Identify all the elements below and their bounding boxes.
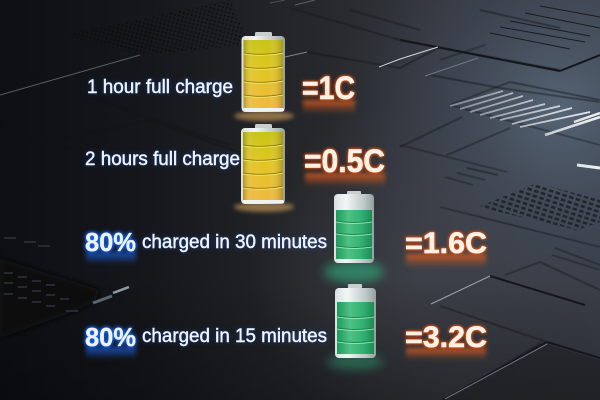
rate: =0.5C: =0.5C: [304, 143, 385, 179]
label: 2 hours full charge: 2 hours full charge: [85, 148, 240, 170]
label: 80% charged in 15 minutes: [85, 322, 327, 359]
rate: =1C: =1C: [302, 70, 355, 106]
battery: yellow 2 hours: [234, 124, 294, 212]
laptop keyboard: [0, 237, 129, 338]
dot grid panel: [478, 183, 600, 230]
label: 1 hour full charge: 1 hour full charge: [87, 76, 233, 98]
label: 80% charged in 15 minutes: 80%: [85, 322, 136, 352]
battery: green 30 minutes: [324, 191, 384, 283]
label: 80% charged in 30 minutes: charged in 30 minutes: [142, 231, 327, 253]
vent slots on the board: [450, 91, 600, 168]
row 3: 80% charged in 30 minutes: [85, 191, 487, 283]
row 1: 1 hour full charge: [87, 32, 355, 121]
battery: green 15 minutes: [327, 284, 383, 369]
top-right slotted panel: [490, 6, 600, 49]
rate: =3.2C: =3.2C: [405, 321, 487, 354]
row 4: 80% charged in 15 minutes: [85, 284, 487, 369]
thick board edges: [400, 40, 600, 400]
battery: yellow 1 hour: [234, 32, 294, 121]
label: 80% charged in 30 minutes: [85, 227, 327, 264]
row 2: 2 hours full charge: [85, 124, 385, 212]
label: 80% charged in 30 minutes: 80%: [85, 227, 136, 257]
rate: =1.6C: =1.6C: [405, 227, 487, 260]
label: 80% charged in 15 minutes: charged in 15 minutes: [142, 325, 327, 347]
